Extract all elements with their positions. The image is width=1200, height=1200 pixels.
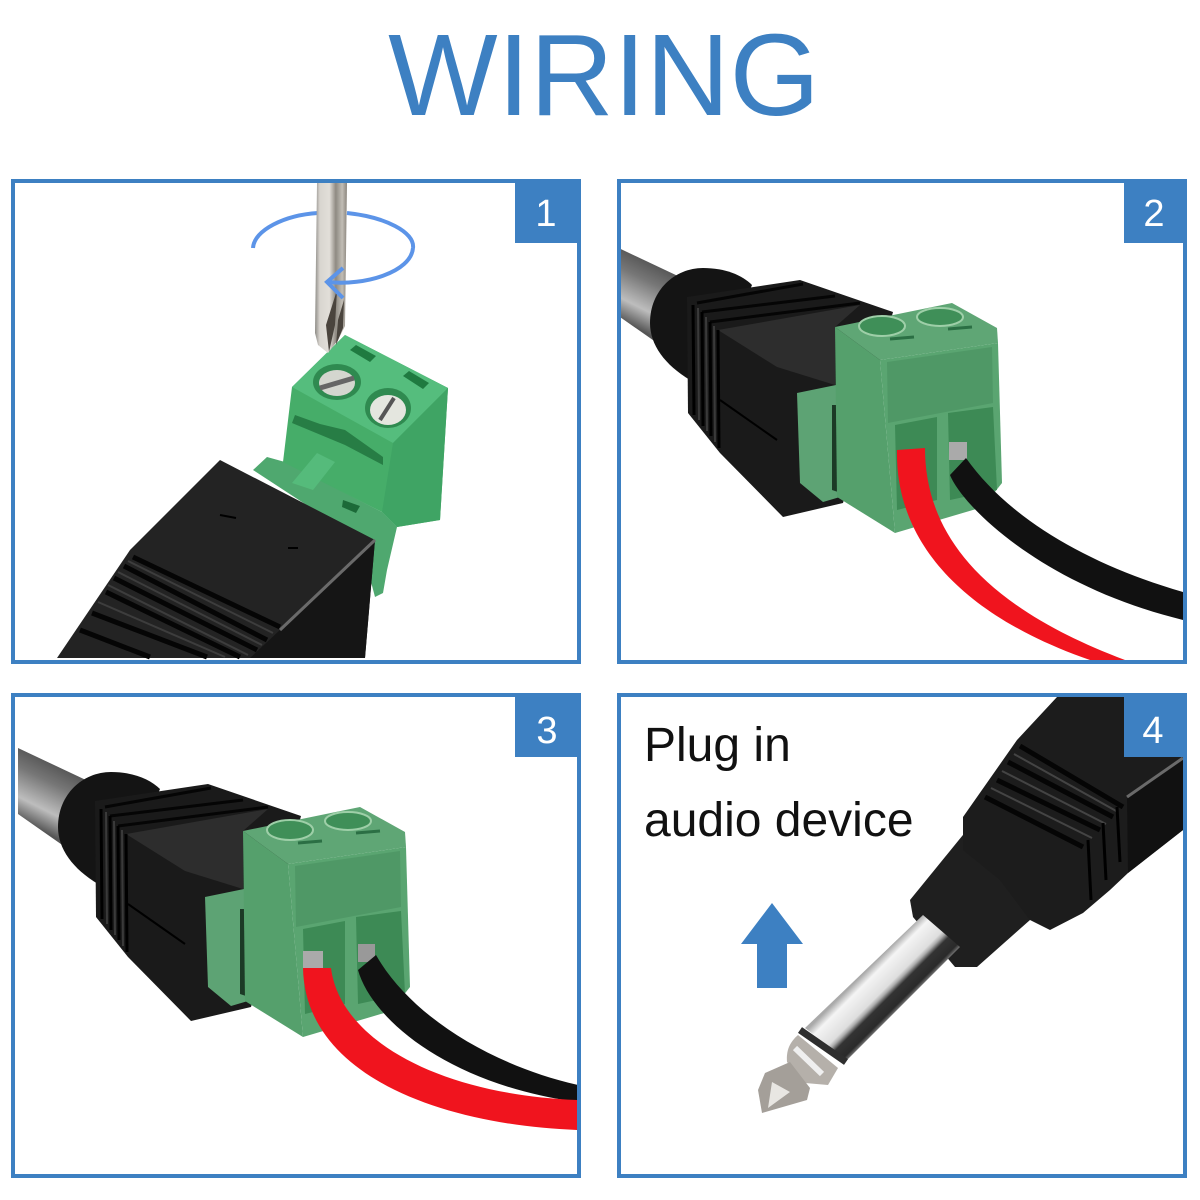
icon: connector assembly <box>610 244 1002 533</box>
arrow: up <box>741 903 803 988</box>
badge 2 <box>1124 182 1184 243</box>
icon: wires <box>303 944 578 1130</box>
icon: cable <box>18 748 88 849</box>
badge 1: 1 <box>535 193 557 235</box>
icon: strain relief <box>650 268 752 385</box>
icon: cable <box>621 249 676 340</box>
badge 1 <box>515 182 578 243</box>
icon: connector body <box>95 784 301 1021</box>
icon: black connector body <box>57 460 375 658</box>
icon: jack plug <box>758 915 960 1113</box>
text: instruction: audio device <box>644 794 914 847</box>
icon: rotation arrow near side <box>327 248 413 298</box>
panel: step 1 <box>13 181 579 662</box>
panel: step 2 <box>610 181 1185 662</box>
badge 4 <box>1124 697 1184 757</box>
icon: strain relief <box>58 772 160 889</box>
icon: terminal block <box>205 807 410 1037</box>
icon: wires <box>897 442 1183 660</box>
icon: rotation arrow far side <box>253 213 413 248</box>
title: WIRING <box>388 10 820 140</box>
panel: step 3 <box>13 695 579 1176</box>
icon: screwdriver <box>315 183 347 353</box>
icon: terminal block <box>797 303 1002 533</box>
icon: connector body <box>687 280 893 517</box>
icon: connector assembly <box>18 748 410 1037</box>
icon: strain relief <box>910 835 1030 967</box>
icon: green terminal block <box>253 335 448 597</box>
text: instruction: Plug in <box>644 719 791 772</box>
badge 2: 2 <box>1143 193 1165 235</box>
badge 4: 4 <box>1142 710 1164 752</box>
panel: step 4 <box>619 695 1185 1176</box>
badge 3: 3 <box>536 710 558 752</box>
badge 3 <box>515 697 578 757</box>
icon: connector body <box>963 697 1183 930</box>
